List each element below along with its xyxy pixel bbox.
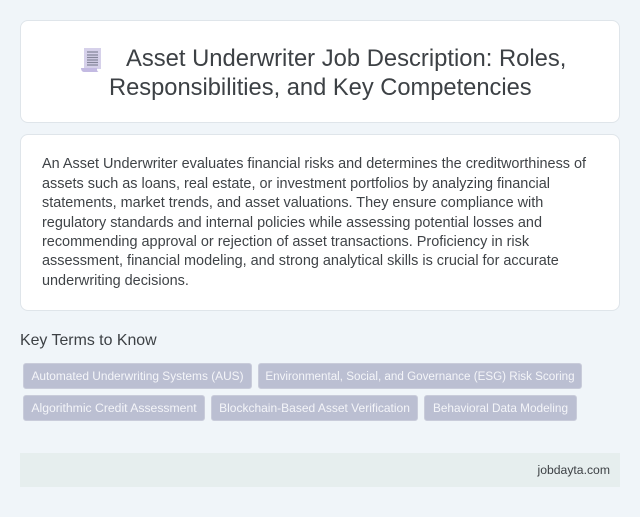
icon: document scroll [81,48,101,72]
panel: description: recommending approval or rejection of asset transactions. Proficiency in risk [42,234,529,250]
footer bar [20,453,620,487]
panel: title card [20,20,620,123]
panel: description: regulatory standards and internal policies while assessing potential losses and [42,215,542,231]
tag [211,395,418,421]
tag: Automated Underwriting Systems (AUS) [31,369,244,383]
tag: Blockchain-Based Asset Verification [219,401,410,415]
title: Asset Underwriter Job Description: Roles, [126,45,566,72]
tag list [23,363,582,421]
panel: description [20,134,620,311]
tag: Algorithmic Credit Assessment [31,401,197,415]
tag [23,395,205,421]
title: Responsibilities, and Key Competencies [109,75,532,101]
footer source: jobdayta.com [538,463,610,477]
tag [258,363,582,389]
heading: key terms: Key Terms to Know [20,332,157,349]
title [109,45,566,101]
tag: Behavioral Data Modeling [433,401,568,415]
tag: Environmental, Social, and Governance (ESG) Risk Scoring [265,370,575,383]
panel: description: assets such as loans, real estate, or investment portfolios by analyzing financial [42,176,550,192]
tag [23,363,252,389]
panel: description: assessment, financial modeling, and strong analytical skills is crucial for accurate [42,253,559,269]
tag [424,395,577,421]
panel: description: An Asset Underwriter evaluates financial risks and determines the creditworthiness of [42,156,586,172]
panel: description: statements, market trends, and asset valuations. They ensure compliance with [42,195,543,211]
panel: description: underwriting decisions. [42,273,189,289]
